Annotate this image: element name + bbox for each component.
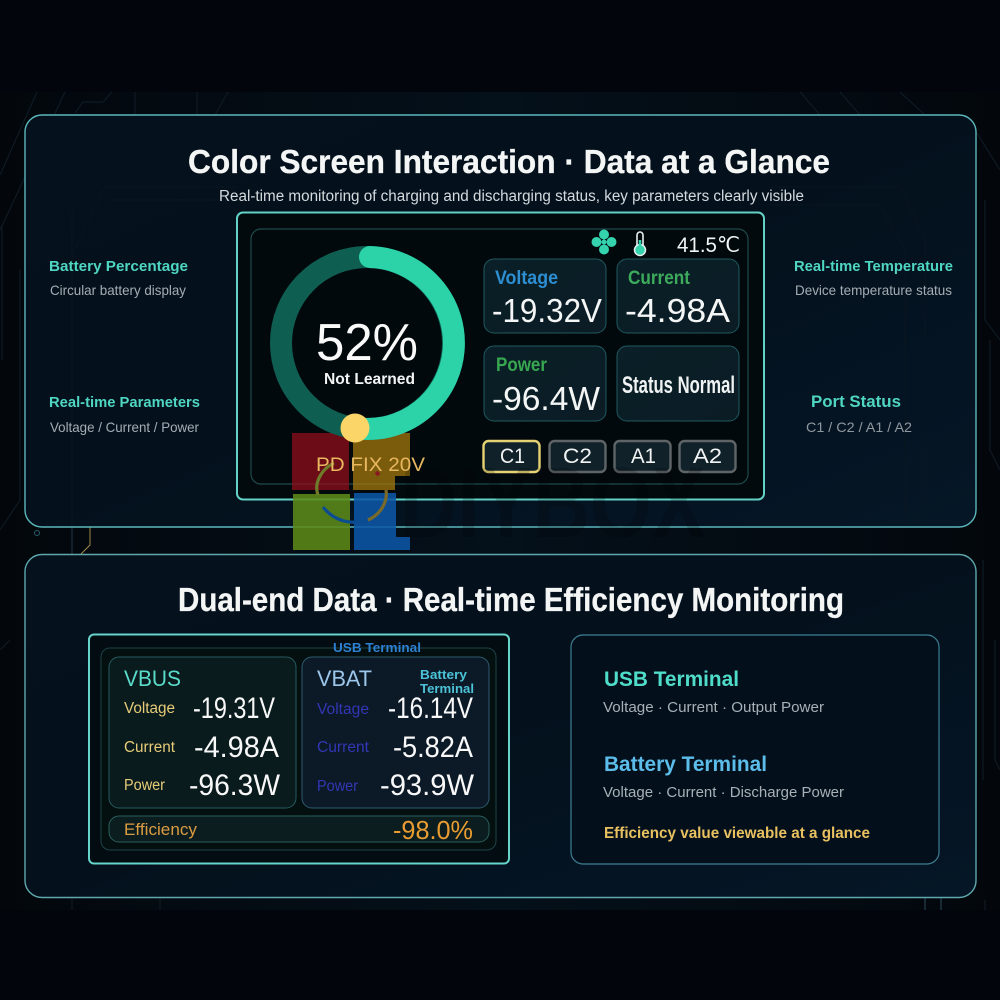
- card: status: Status Normal: [622, 372, 735, 399]
- watermark: logo: [292, 433, 705, 559]
- callout: port status: Port Status: [811, 392, 901, 411]
- panel: color screen interaction: [25, 115, 976, 527]
- callout: real-time parameters: Real-time Parameters: [49, 394, 200, 411]
- info panel: terminals: [571, 635, 939, 864]
- card: voltage: [484, 259, 606, 333]
- card: VBAT: -16.14V: [388, 692, 473, 725]
- callout: real-time temperature: Real-time Temperature: [794, 258, 953, 275]
- battery learned status: Not Learned: [324, 371, 415, 388]
- card: VBAT: Voltage: [317, 701, 369, 718]
- card: current: Current: [628, 268, 691, 289]
- card: VBAT: [302, 657, 489, 808]
- card: current: [617, 259, 739, 333]
- card: VBUS: Power: [124, 777, 165, 794]
- card: VBUS: Current: [124, 739, 176, 756]
- info panel: terminals: Voltage · Current · Discharge Power: [603, 784, 844, 801]
- device screen: [237, 212, 764, 500]
- dual-end screen: [89, 634, 509, 864]
- icon: fan: [592, 230, 616, 254]
- card: VBUS: -96.3W: [189, 769, 281, 802]
- port button: A1: A1: [631, 445, 656, 468]
- callout: battery percentage: [49, 258, 188, 298]
- callout: port status: [806, 392, 912, 435]
- card: VBUS: -19.31V: [193, 692, 275, 725]
- callout: real-time temperature: Device temperature status: [795, 282, 952, 298]
- card: voltage: -19.32V: [492, 292, 602, 329]
- card: power: Power: [496, 355, 548, 376]
- subheading: Real-time monitoring of charging and discharging status, key parameters clearly visible: [219, 188, 804, 205]
- heading: color screen interaction: Color Screen Interaction · Data at a Glance: [188, 143, 830, 180]
- efficiency bar: [109, 815, 489, 845]
- port button: C1: [484, 441, 540, 472]
- port button: C2: C2: [563, 445, 592, 468]
- port button: C1: C1: [500, 445, 525, 468]
- card: VBUS: -4.98A: [194, 731, 279, 764]
- port button: A2: A2: [693, 445, 722, 468]
- card: VBAT: Power: [317, 778, 358, 795]
- card: VBAT: VBAT: [317, 666, 372, 691]
- card: VBUS: VBUS: [124, 666, 181, 691]
- card: status: [617, 346, 739, 421]
- panel: dual-end data: [25, 554, 976, 898]
- card: VBAT: Terminal: [420, 681, 474, 696]
- card: VBAT: -5.82A: [393, 731, 473, 764]
- battery ring gauge: [281, 257, 454, 442]
- port button: A1: [614, 441, 670, 472]
- efficiency bar: -98.0%: [393, 815, 473, 845]
- efficiency bar: Efficiency: [124, 820, 197, 839]
- card: VBUS: [109, 657, 296, 808]
- port button: A2: [680, 441, 736, 472]
- port button: C2: [550, 441, 606, 472]
- info panel: terminals: Voltage · Current · Output Power: [603, 699, 824, 716]
- card: voltage: Voltage: [495, 268, 558, 289]
- heading: dual-end data: Dual-end Data · Real-time Efficiency Monitoring: [178, 581, 844, 618]
- icon: thermometer: [634, 232, 646, 256]
- watermark: brand text: DIYBOX: [400, 447, 705, 559]
- callout: port status: C1 / C2 / A1 / A2: [806, 419, 912, 435]
- card: power: -96.4W: [492, 380, 601, 417]
- callout: battery percentage: Battery Percentage: [49, 258, 188, 275]
- label: USB terminal: USB Terminal: [333, 640, 421, 655]
- card: current: -4.98A: [625, 292, 730, 329]
- info panel: terminals: Efficiency value viewable at a glance: [604, 825, 870, 842]
- card: VBAT: Current: [317, 739, 370, 756]
- temperature reading: 41.5℃: [677, 234, 740, 257]
- card: VBAT: -93.9W: [380, 769, 475, 802]
- card: VBUS: Voltage: [124, 700, 175, 717]
- callout: real-time temperature: [794, 258, 953, 298]
- callout: real-time parameters: Voltage / Current / Power: [50, 419, 199, 435]
- battery percentage: 52%: [316, 314, 418, 372]
- mode label: PD FIX 20V: PD FIX 20V: [316, 455, 425, 476]
- card: power: [484, 346, 606, 421]
- callout: battery percentage: Circular battery display: [50, 282, 186, 298]
- callout: real-time parameters: [49, 394, 200, 435]
- card: VBAT: Battery: [420, 667, 468, 682]
- info panel: terminals: USB Terminal: [604, 668, 739, 691]
- info panel: terminals: Battery Terminal: [604, 753, 767, 776]
